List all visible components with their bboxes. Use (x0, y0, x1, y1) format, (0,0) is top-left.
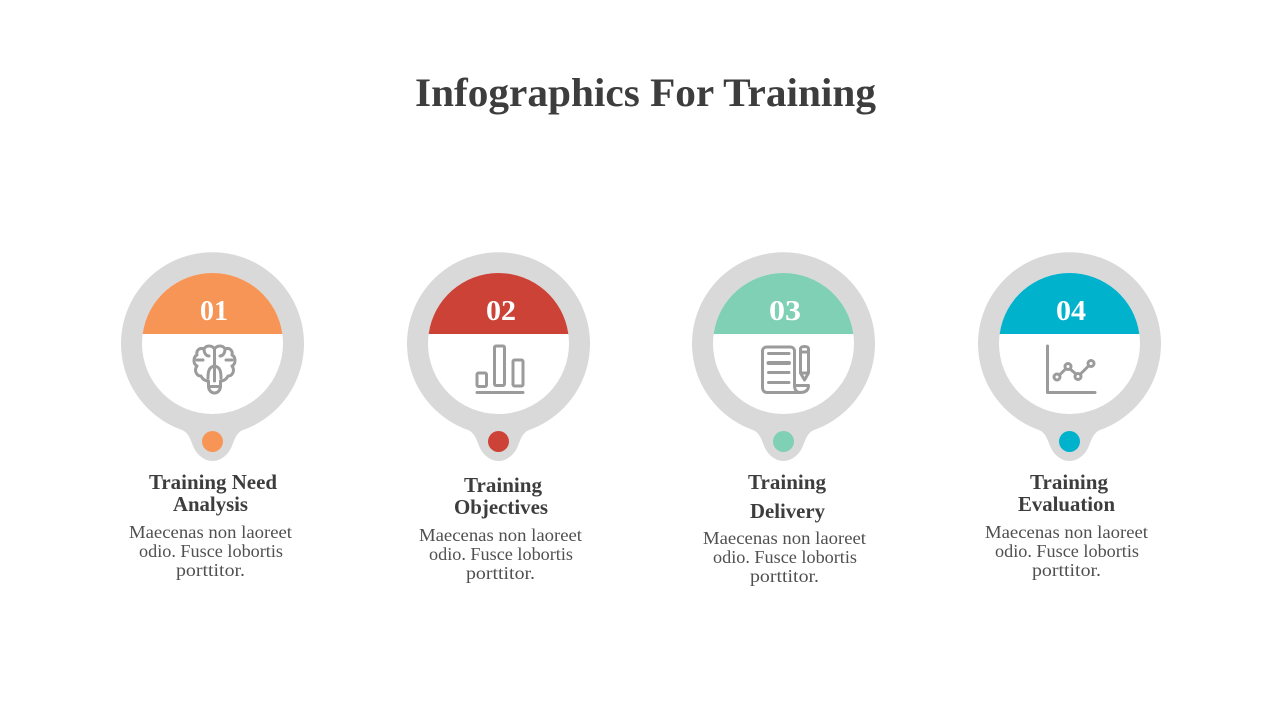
text block 02 (419, 525, 582, 583)
pin badge 01 (121, 252, 304, 461)
text block 04: odio. Fusce lobortis (995, 541, 1139, 561)
number 03: 03 (769, 295, 801, 327)
heading 04: Training (1030, 470, 1109, 494)
text block 01: odio. Fusce lobortis (139, 541, 283, 561)
text block 02: odio. Fusce lobortis (429, 544, 573, 564)
text block 02: Maecenas non laoreet (419, 525, 582, 545)
heading 03: Training (748, 470, 827, 494)
heading 04: Evaluation (1018, 492, 1115, 516)
text block 03: Maecenas non laoreet (703, 528, 866, 548)
text block 01: Maecenas non laoreet (129, 522, 292, 542)
heading 02: Objectives (454, 495, 548, 519)
number 02: 02 (486, 295, 516, 327)
heading 03 (748, 470, 827, 523)
text block 04: porttitor. (1032, 560, 1101, 580)
panel: step 01 training need analysis (121, 252, 304, 580)
text block 01 (129, 522, 292, 580)
number 01: 01 (200, 295, 228, 327)
text block 01: porttitor. (176, 560, 245, 580)
number 04: 04 (1056, 295, 1086, 327)
pin badge 04 (978, 252, 1161, 461)
pin badge 02 (407, 252, 590, 461)
title: Infographics For Training (415, 70, 876, 115)
text block 03: porttitor. (750, 566, 819, 586)
text block 04: Maecenas non laoreet (985, 522, 1148, 542)
heading 02: Training (464, 473, 543, 497)
panel: step 04 training evaluation (978, 252, 1161, 580)
icon: brain (194, 346, 235, 393)
text block 02: porttitor. (466, 563, 535, 583)
panel: step 03 training delivery (692, 252, 875, 586)
text block 03 (703, 528, 866, 586)
text block 04 (985, 522, 1148, 580)
text block 03: odio. Fusce lobortis (713, 547, 857, 567)
icon: line chart (1048, 346, 1095, 392)
heading 03: Delivery (750, 499, 825, 523)
heading 01: Analysis (173, 492, 248, 516)
heading 02 (454, 473, 548, 519)
heading 01: Training Need (149, 470, 277, 494)
icon: document and pencil (762, 346, 808, 392)
pin badge 03 (692, 252, 875, 461)
icon: bar chart (477, 346, 523, 392)
heading 04 (1018, 470, 1115, 516)
heading 01 (149, 470, 277, 516)
panel: step 02 training objectives (407, 252, 590, 583)
